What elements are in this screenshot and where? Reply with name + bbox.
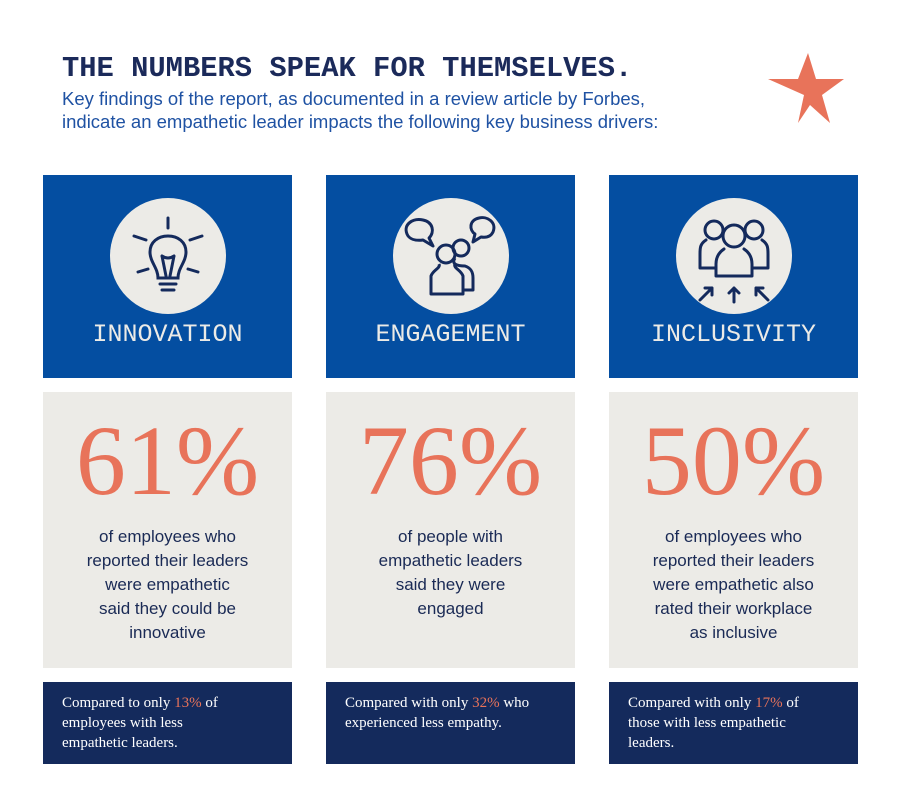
comparison text: those with less empathetic: [628, 715, 786, 731]
stat text: engaged: [417, 599, 484, 618]
stat text: said they were: [396, 575, 505, 594]
stat text: [87, 527, 248, 642]
stat text: [653, 527, 814, 642]
subtitle: Key findings of the report, as documented in a review article by Forbes,: [62, 88, 645, 109]
stat text: were empathetic also: [653, 575, 814, 594]
stat number: 76%: [359, 405, 542, 516]
stat text: said they could be: [99, 599, 236, 618]
subtitle: [62, 88, 658, 132]
panel: comparison 13: [43, 682, 292, 764]
comparison text: [345, 695, 529, 731]
panel: comparison 17: [609, 682, 858, 764]
panel: stat 76: [326, 392, 575, 668]
stat text: of employees who: [99, 527, 236, 546]
panel: comparison 32: [326, 682, 575, 764]
comparison text: employees with less: [62, 715, 183, 731]
icon: people talking: [393, 198, 509, 314]
comparison text: Compared with only 17% of: [628, 695, 799, 711]
stat text: rated their workplace: [655, 599, 812, 618]
label: inclusivity: INCLUSIVITY: [651, 320, 816, 349]
icon: lightbulb: [110, 198, 226, 314]
comparison text: empathetic leaders.: [62, 735, 178, 751]
stat text: were empathetic: [105, 575, 230, 594]
comparison text: [62, 695, 218, 751]
panel: stat 50: [609, 392, 858, 668]
comparison text: Compared to only 13% of: [62, 695, 218, 711]
subtitle: indicate an empathetic leader impacts the following key business drivers:: [62, 111, 658, 132]
title: THE NUMBERS SPEAK FOR THEMSELVES.: [62, 52, 632, 85]
panel: innovation header: [43, 175, 292, 378]
icon: group with arrows: [676, 198, 792, 314]
stat text: reported their leaders: [653, 551, 814, 570]
stat text: reported their leaders: [87, 551, 248, 570]
panel: inclusivity header: [609, 175, 858, 378]
label: innovation: INNOVATION: [92, 320, 243, 349]
comparison text: experienced less empathy.: [345, 715, 502, 731]
stat number: 61%: [76, 405, 259, 516]
stat text: [379, 527, 522, 618]
comparison text: [628, 695, 799, 751]
icon: star: [768, 53, 844, 123]
panel: engagement header: [326, 175, 575, 378]
stat number: 50%: [642, 405, 825, 516]
stat text: of employees who: [665, 527, 802, 546]
panel: stat 61: [43, 392, 292, 668]
comparison text: Compared with only 32% who: [345, 695, 529, 711]
stat text: innovative: [129, 623, 206, 642]
stat text: as inclusive: [690, 623, 777, 642]
stat text: empathetic leaders: [379, 551, 522, 570]
comparison text: leaders.: [628, 735, 674, 751]
stat text: of people with: [398, 527, 503, 546]
label: engagement: ENGAGEMENT: [375, 320, 526, 349]
